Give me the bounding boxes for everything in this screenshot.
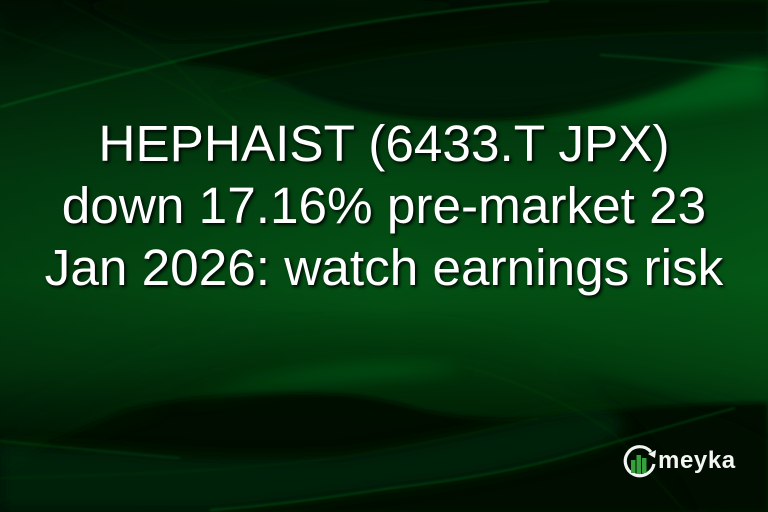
decorative wave lines — [0, 1, 768, 125]
logo: meyka — [624, 445, 736, 478]
icon: circular arrow with bars — [624, 445, 656, 478]
title: Jan 2026: watch earnings risk — [45, 239, 723, 296]
title: HEPHAIST (6433.T JPX) — [98, 115, 670, 172]
title: down 17.16% pre-market 23 — [62, 177, 706, 234]
wordmark: meyka — [658, 447, 736, 474]
title — [45, 115, 726, 300]
